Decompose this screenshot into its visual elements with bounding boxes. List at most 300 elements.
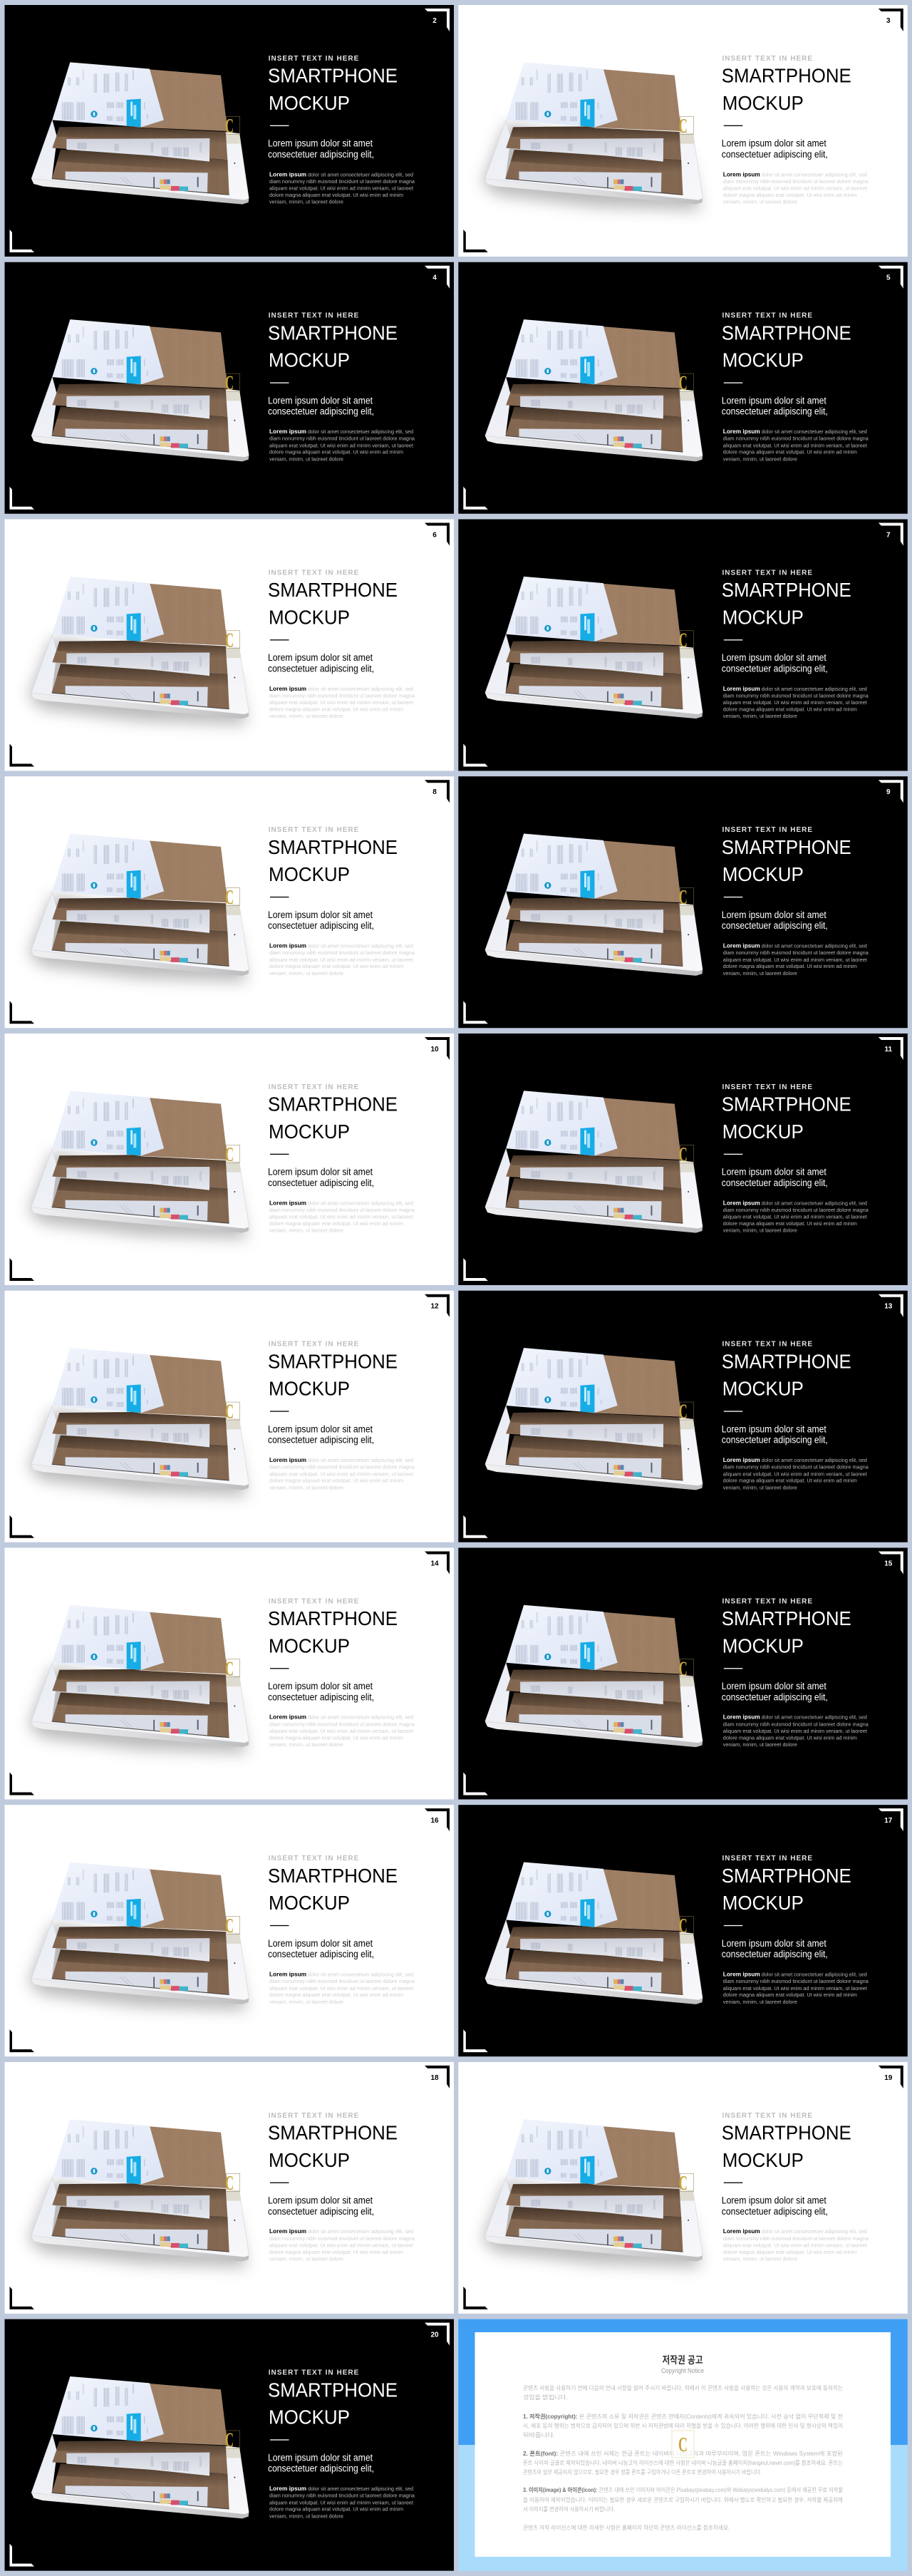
slide background [4,2062,454,2314]
body text: Lorem ipsum [723,1199,760,1206]
title: SMARTPHONE [722,65,851,87]
body text: dolore magna aliquam erat volutpat. Ut wisi enim ad minim [723,450,857,455]
body text [269,2485,415,2519]
body text: diam nonummy nibh euismod tincidunt ut laoreet dolore magna [723,951,869,956]
phone mockup [31,319,249,461]
body text [723,1199,869,1234]
body text: dolore magna aliquam erat volutpat. Ut wisi enim ad minim [269,1736,403,1741]
subtitle: Lorem ipsum dolor sit amet [268,1681,373,1691]
subtitle: consectetuer adipiscing elit, [722,1691,828,1702]
body text: veniam, minim, ut laoreet dolore [723,714,797,719]
body text: dolor sit amet consectetuer adipiscing elit, sed [762,2230,867,2235]
divider [724,639,742,640]
body text: aliquam erat volutpat. Ut wisi enim ad minim veniam, ut laoreet [723,187,867,192]
eyebrow: INSERT TEXT IN HERE [269,1341,359,1349]
subtitle: consectetuer adipiscing elit, [722,663,828,674]
subtitle [722,910,828,931]
phone shadow [28,2180,247,2267]
title [268,65,398,114]
logo mark: C [225,1401,234,1423]
subtitle: Lorem ipsum dolor sit amet [722,652,826,663]
page number: 2 [432,17,437,25]
page number: 19 [884,2074,893,2082]
page number: 9 [886,788,891,796]
slide 14 [4,1547,454,1799]
title: MOCKUP [269,1378,350,1400]
body text [723,2227,869,2262]
corner brackets [10,1808,450,2052]
body text: Lorem ipsum [269,1970,306,1977]
body text: dolore magna aliquam erat volutpat. Ut wisi enim ad minim [723,1479,857,1484]
title: SMARTPHONE [268,1350,398,1372]
subtitle: consectetuer adipiscing elit, [268,2463,374,2474]
body text: veniam, minim, ut laoreet dolore [269,1743,343,1748]
body text: diam nonummy nibh euismod tincidunt ut laoreet dolore magna [269,1979,415,1984]
body text: dolor sit amet consectetuer adipiscing elit, sed [308,1972,413,1977]
corner brackets [10,2066,450,2309]
eyebrow: INSERT TEXT IN HERE [722,1597,812,1605]
phone mockup [31,62,249,205]
subtitle [722,1681,828,1702]
subtitle: consectetuer adipiscing elit, [268,1178,374,1188]
title: MOCKUP [722,863,804,885]
eyebrow: INSERT TEXT IN HERE [269,569,359,577]
notice body text: 을 이용하여 제작되었습니다. 이미지는 필요한 경우 새로운 콘텐츠로 구입하시기 바랍니다. 위에서 별도로 확인하고 필요한 경우, 저작물 제공처에 [523,2496,843,2503]
phone mockup [31,1091,249,1233]
body text: diam nonummy nibh euismod tincidunt ut laoreet dolore magna [269,694,415,699]
page number: 15 [884,1560,893,1567]
body text: veniam, minim, ut laoreet dolore [723,1229,797,1234]
title: MOCKUP [269,1120,350,1143]
subtitle [722,1423,828,1446]
body text: Lorem ipsum [269,942,306,949]
body text: veniam, minim, ut laoreet dolore [269,2257,343,2262]
body text: aliquam erat volutpat. Ut wisi enim ad minim veniam, ut laoreet [723,958,867,963]
title: SMARTPHONE [722,1093,851,1116]
title: MOCKUP [269,863,350,885]
title: SMARTPHONE [722,1350,851,1372]
body text: dolore magna aliquam erat volutpat. Ut wisi enim ad minim [269,1479,403,1484]
subtitle: Lorem ipsum dolor sit amet [722,1423,826,1434]
title: SMARTPHONE [722,836,851,858]
corner brackets [10,522,450,766]
subtitle: Lorem ipsum dolor sit amet [268,1167,373,1178]
body text: veniam, minim, ut laoreet dolore [723,457,797,462]
title [722,579,851,628]
slide background [4,519,454,771]
body text: dolor sit amet consectetuer adipiscing elit, sed [308,1201,413,1206]
subtitle [722,395,828,417]
body text: aliquam erat volutpat. Ut wisi enim ad minim veniam, ut laoreet [269,2244,413,2249]
phone mockup [485,834,703,976]
body text: diam nonummy nibh euismod tincidunt ut laoreet dolore magna [723,694,869,699]
title [268,2122,398,2171]
eyebrow: INSERT TEXT IN HERE [269,2112,359,2120]
title: SMARTPHONE [268,321,398,344]
subtitle: Lorem ipsum dolor sit amet [722,1681,826,1691]
phone mockup [485,577,703,718]
body text: diam nonummy nibh euismod tincidunt ut laoreet dolore magna [723,1208,869,1213]
notice body text: 콘텐츠 저작 라이선스에 대한 자세한 사항은 홈페이지 하단의 콘텐츠 라이선스를 참조하세요. [523,2524,730,2531]
corner brackets [463,522,903,766]
title: MOCKUP [722,349,804,371]
body text: aliquam erat volutpat. Ut wisi enim ad minim veniam, ut laoreet [723,1987,867,1992]
title [722,1093,851,1143]
body text: veniam, minim, ut laoreet dolore [269,2000,343,2005]
body text: diam nonummy nibh euismod tincidunt ut laoreet dolore magna [269,2237,415,2242]
subtitle: consectetuer adipiscing elit, [722,149,828,160]
body text: aliquam erat volutpat. Ut wisi enim ad minim veniam, ut laoreet [269,701,413,706]
title [268,1350,398,1400]
title [268,321,398,371]
corner brackets [10,1294,450,1538]
body text: veniam, minim, ut laoreet dolore [723,1743,797,1748]
slide background [458,776,908,1028]
title: SMARTPHONE [722,579,851,601]
body text: diam nonummy nibh euismod tincidunt ut laoreet dolore magna [269,1208,415,1213]
phone shadow [28,1152,247,1239]
divider [270,1411,289,1412]
logo mark: C [679,1144,688,1166]
eyebrow: INSERT TEXT IN HERE [269,2369,359,2377]
slide background [4,1805,454,2056]
page number: 10 [430,1046,439,1053]
eyebrow: INSERT TEXT IN HERE [722,1083,812,1091]
divider [724,382,742,383]
subtitle: consectetuer adipiscing elit, [268,406,374,417]
subtitle: consectetuer adipiscing elit, [722,920,828,931]
subtitle [268,910,374,931]
body text: dolore magna aliquam erat volutpat. Ut wisi enim ad minim [723,1736,857,1741]
title: MOCKUP [722,92,804,114]
watermark logo [672,2431,694,2458]
logo mark: C [225,1915,234,1937]
eyebrow: INSERT TEXT IN HERE [722,1855,812,1863]
title: MOCKUP [722,1634,804,1657]
slide 18 [4,2062,454,2314]
body text: aliquam erat volutpat. Ut wisi enim ad minim veniam, ut laoreet [723,443,867,448]
eyebrow: INSERT TEXT IN HERE [722,55,812,63]
subtitle: consectetuer adipiscing elit, [268,920,374,931]
title: MOCKUP [269,1892,350,1914]
body text: dolore magna aliquam erat volutpat. Ut wisi enim ad minim [269,193,403,198]
body text: aliquam erat volutpat. Ut wisi enim ad minim veniam, ut laoreet [723,1729,867,1734]
logo mark: C [679,629,688,651]
notice body text [523,2384,843,2531]
title [722,1865,851,1914]
slide 12 [4,1291,454,1542]
title: SMARTPHONE [268,65,398,87]
notice body text: 콘텐츠의 일부 제공되지 않으므로, 필요한 경우 정품 폰트를 구입하거나 다른 폰트로 변경하여 사용하시기 바랍니다. [523,2468,762,2475]
page number: 8 [432,788,437,796]
body text: veniam, minim, ut laoreet dolore [723,972,797,977]
title: MOCKUP [722,606,804,628]
body text: aliquam erat volutpat. Ut wisi enim ad minim veniam, ut laoreet [269,2500,413,2505]
body text: veniam, minim, ut laoreet dolore [723,200,797,205]
divider [270,639,289,640]
subtitle [722,652,828,674]
slide 20 [4,2319,454,2571]
logo mark: C [679,1915,688,1937]
body text: diam nonummy nibh euismod tincidunt ut laoreet dolore magna [723,2237,869,2242]
body text: Lorem ipsum [723,1456,760,1463]
page number: 6 [432,531,437,539]
body text: veniam, minim, ut laoreet dolore [269,972,343,977]
body text: dolor sit amet consectetuer adipiscing elit, sed [308,944,413,949]
subtitle: consectetuer adipiscing elit, [722,406,828,417]
slide background [4,262,454,514]
slide background [4,5,454,257]
body text: veniam, minim, ut laoreet dolore [269,1485,343,1490]
logo mark: C [679,887,688,909]
subtitle: consectetuer adipiscing elit, [722,1949,828,1959]
page number: 4 [432,274,437,282]
body text: dolor sit amet consectetuer adipiscing elit, sed [762,172,867,177]
slide background [4,1034,454,1285]
body text [269,1714,415,1748]
body text: diam nonummy nibh euismod tincidunt ut laoreet dolore magna [269,180,415,185]
subtitle: consectetuer adipiscing elit, [722,1435,828,1446]
title: SMARTPHONE [268,836,398,858]
phone mockup [485,62,703,205]
eyebrow: INSERT TEXT IN HERE [269,55,359,63]
slide 13 [458,1291,908,1542]
subtitle: consectetuer adipiscing elit, [722,1178,828,1188]
subtitle [268,1938,374,1959]
body text: dolore magna aliquam erat volutpat. Ut wisi enim ad minim [269,2508,403,2513]
body text: diam nonummy nibh euismod tincidunt ut laoreet dolore magna [269,1722,415,1727]
slide 11 [458,1034,908,1285]
panel: copyright notice [458,2319,908,2571]
subtitle: Lorem ipsum dolor sit amet [722,2195,826,2206]
eyebrow: INSERT TEXT IN HERE [269,1083,359,1091]
body text: aliquam erat volutpat. Ut wisi enim ad minim veniam, ut laoreet [269,187,413,192]
subtitle: Lorem ipsum dolor sit amet [722,1938,826,1949]
body text [723,1714,869,1748]
subtitle: Lorem ipsum dolor sit amet [268,1423,373,1434]
subtitle [268,652,374,674]
body text: dolor sit amet consectetuer adipiscing elit, sed [762,430,867,435]
subtitle: Lorem ipsum dolor sit amet [722,1167,826,1178]
notice body text: 콘텐츠 서핑을 사용하기 전에 다음의 안내 사항을 읽어 주시기 바랍니다. 위에서 이 콘텐츠 서핑을 사용하는 것은 사용자 계약과 보호에 동의하는 [523,2384,843,2391]
slide background [4,1291,454,1542]
divider [270,1925,289,1926]
subtitle: consectetuer adipiscing elit, [268,1691,374,1702]
body text: aliquam erat volutpat. Ut wisi enim ad minim veniam, ut laoreet [269,443,413,448]
corner brackets [10,266,450,510]
eyebrow: INSERT TEXT IN HERE [269,1855,359,1863]
slide 7 [458,519,908,771]
corner brackets [463,266,903,510]
divider [724,1668,742,1669]
body text: dolor sit amet consectetuer adipiscing elit, sed [308,687,413,692]
title: SMARTPHONE [268,579,398,601]
body text: Lorem ipsum [269,685,306,692]
phone mockup [31,1348,249,1490]
phone mockup [485,1348,703,1490]
slide background [4,776,454,1028]
corner brackets [463,1294,903,1538]
slide background [458,1805,908,2056]
title [268,836,398,885]
body text: Lorem ipsum [269,1199,306,1206]
body text: aliquam erat volutpat. Ut wisi enim ad minim veniam, ut laoreet [269,1215,413,1220]
logo mark: C [225,373,234,395]
title [268,1607,398,1657]
body text: Lorem ipsum [269,428,306,435]
subtitle: Lorem ipsum dolor sit amet [268,1938,373,1949]
body text: Lorem ipsum [269,1714,306,1721]
body text: diam nonummy nibh euismod tincidunt ut laoreet dolore magna [269,2494,415,2499]
logo mark: C [225,115,234,138]
divider [724,1154,742,1155]
body text: veniam, minim, ut laoreet dolore [723,2257,797,2262]
body text: dolor sit amet consectetuer adipiscing elit, sed [762,1972,867,1977]
body text: aliquam erat volutpat. Ut wisi enim ad minim veniam, ut laoreet [723,1215,867,1220]
body text: diam nonummy nibh euismod tincidunt ut laoreet dolore magna [723,1465,869,1470]
phone mockup [31,2119,249,2262]
body text: dolore magna aliquam erat volutpat. Ut wisi enim ad minim [269,1993,403,1998]
notice body text: 폰트 사이의 글꼴로 제작되었습니다. 네이버 나눔고딕 라이선스에 대한 사항은 네이버 나눔글꼴 홈페이지(hangeul.naver.com)를 참조하세요. 폰트는 [523,2459,843,2466]
body text: diam nonummy nibh euismod tincidunt ut laoreet dolore magna [723,1722,869,1727]
notice body text: 2. 폰트(font): 콘텐츠 내에 쓰인 서체는 한글 폰트는 네이버의 나눔고딕과 마루부리이며, 영문 폰트는 Windows System에 포함된 [523,2450,843,2457]
body text [723,942,869,977]
body text: dolore magna aliquam erat volutpat. Ut wisi enim ad minim [723,193,857,198]
body text: dolor sit amet consectetuer adipiscing elit, sed [762,1716,867,1721]
body text [269,1456,415,1490]
corner brackets [463,1551,903,1795]
body text [723,685,869,719]
slide background [458,2062,908,2314]
subtitle [722,1938,828,1959]
body text: dolor sit amet consectetuer adipiscing elit, sed [762,1458,867,1463]
slide background [458,1547,908,1799]
page number: 3 [886,17,891,25]
body text: aliquam erat volutpat. Ut wisi enim ad minim veniam, ut laoreet [723,1472,867,1477]
divider [270,1154,289,1155]
subtitle [268,138,374,160]
body text: Lorem ipsum [723,1970,760,1977]
notice heading: 저작권 공고 [663,2354,703,2366]
phone mockup [31,2376,249,2518]
subtitle: consectetuer adipiscing elit, [268,663,374,674]
title [268,579,398,628]
subtitle: Lorem ipsum dolor sit amet [268,2452,373,2463]
body text: dolor sit amet consectetuer adipiscing elit, sed [762,944,867,949]
phone mockup [31,834,249,976]
phone mockup [485,1605,703,1747]
phone shadow [482,123,700,210]
body text: diam nonummy nibh euismod tincidunt ut laoreet dolore magna [269,951,415,956]
body text: dolore magna aliquam erat volutpat. Ut wisi enim ad minim [723,707,857,712]
logo mark: C [679,373,688,395]
eyebrow: INSERT TEXT IN HERE [269,826,359,834]
subtitle: Lorem ipsum dolor sit amet [268,652,373,663]
slide background [458,519,908,771]
body text: Lorem ipsum [723,170,760,177]
title: MOCKUP [269,1634,350,1657]
phone shadow [28,1924,247,2010]
title: SMARTPHONE [268,1607,398,1629]
body text [269,942,415,977]
corner brackets [463,780,903,1024]
phone mockup [485,2119,703,2262]
body text: dolor sit amet consectetuer adipiscing elit, sed [308,172,413,177]
body text: dolor sit amet consectetuer adipiscing elit, sed [308,1458,413,1463]
title: SMARTPHONE [722,2122,851,2144]
title [722,321,851,371]
watermark logo: C [678,2434,688,2456]
slide 8 [4,776,454,1028]
title [722,65,851,114]
page number: 14 [430,1560,439,1567]
body text: diam nonummy nibh euismod tincidunt ut laoreet dolore magna [723,180,869,185]
title [268,1093,398,1143]
notice body text: 서 이미지를 변경하여 사용하시기 바랍니다. [523,2505,615,2513]
title [722,2122,851,2171]
subtitle [268,1423,374,1446]
logo mark: C [679,2173,688,2195]
slide 5 [458,262,908,514]
slide 10 [4,1034,454,1285]
phone mockup [485,319,703,461]
slide 3 [458,5,908,257]
title: MOCKUP [722,1378,804,1400]
subtitle [722,2195,828,2217]
title: SMARTPHONE [722,1607,851,1629]
title [722,836,851,885]
logo mark: C [679,1658,688,1680]
subtitle: consectetuer adipiscing elit, [268,1435,374,1446]
body text: veniam, minim, ut laoreet dolore [723,2000,797,2005]
subtitle [268,1681,374,1702]
subtitle: Lorem ipsum dolor sit amet [722,138,826,149]
subtitle [722,138,828,160]
phone shadow [28,895,247,982]
slide 2 [4,5,454,257]
phone mockup [31,1863,249,2004]
page number: 18 [430,2074,439,2082]
phone shadow [482,2180,700,2267]
body text: veniam, minim, ut laoreet dolore [269,1229,343,1234]
eyebrow: INSERT TEXT IN HERE [722,826,812,834]
body text [269,170,415,205]
eyebrow: INSERT TEXT IN HERE [722,2112,812,2120]
subtitle [268,1167,374,1188]
subtitle: consectetuer adipiscing elit, [268,1949,374,1959]
title: SMARTPHONE [722,1865,851,1887]
body text: dolor sit amet consectetuer adipiscing elit, sed [308,2487,413,2492]
divider [724,125,742,126]
body text: aliquam erat volutpat. Ut wisi enim ad minim veniam, ut laoreet [269,1472,413,1477]
corner brackets [10,1551,450,1795]
body text: dolore magna aliquam erat volutpat. Ut wisi enim ad minim [269,450,403,455]
corner brackets [463,1808,903,2052]
subtitle: Lorem ipsum dolor sit amet [268,395,373,406]
body text: Lorem ipsum [269,2485,306,2492]
slide background [4,1547,454,1799]
subtitle: consectetuer adipiscing elit, [268,149,374,160]
notice card [475,2332,891,2557]
phone shadow [28,1666,247,1753]
title [722,1350,851,1400]
divider [270,382,289,383]
subtitle [722,1167,828,1188]
body text: veniam, minim, ut laoreet dolore [269,200,343,205]
body text: aliquam erat volutpat. Ut wisi enim ad minim veniam, ut laoreet [269,958,413,963]
phone mockup [31,1605,249,1747]
body text: aliquam erat volutpat. Ut wisi enim ad minim veniam, ut laoreet [723,2244,867,2249]
